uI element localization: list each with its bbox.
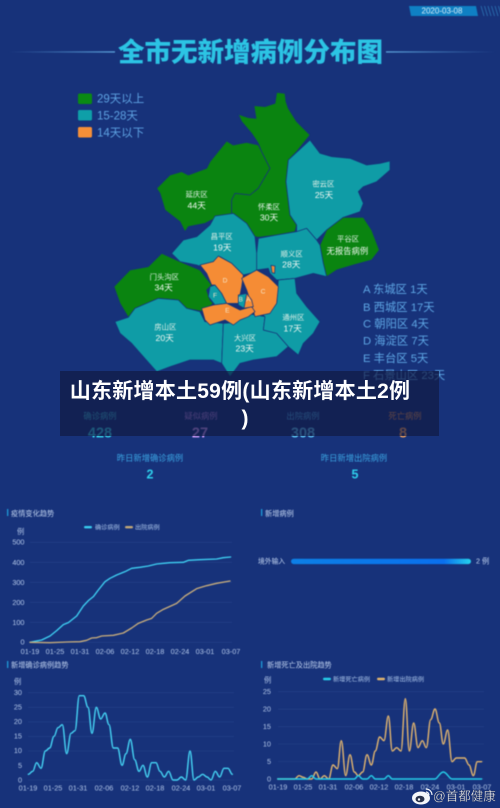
panel: new deaths and discharges chart: 01-31 [319,782,337,792]
urban district list: F 石景山区 23天 [363,369,445,382]
icon: weibo [412,789,432,804]
urban district list: C 朝阳区 4天 [363,318,429,330]
panel: new deaths and discharges chart: 01-25 [294,782,312,792]
panel: new deaths and discharges chart: 0 [267,774,271,784]
district labels: 大兴区 [234,333,256,342]
district labels: 通州区 [282,313,304,322]
panel: new deaths and discharges chart: 03-07 [473,782,491,792]
panel: epidemic trend chart: 02-06 [96,647,114,656]
panel: epidemic trend chart: 疫情变化趋势 [11,509,54,518]
panel: epidemic trend chart: 500 [12,538,24,546]
panel: new confirmed trend chart: 新增确诊病例趋势 [11,660,69,670]
district map [114,92,390,377]
panel: new confirmed trend chart: 0 [18,776,22,784]
panel: epidemic trend chart: 02-24 [171,647,189,656]
line: confirmed and discharged cases [30,557,231,643]
district: Shijingshan F [208,285,227,305]
panel: epidemic trend chart: 200 [12,598,24,607]
district labels: 顺义区 [281,249,303,258]
line: new confirmed cases [28,696,232,780]
panel: epidemic trend chart: 例 [17,527,24,536]
panel: epidemic trend chart: 0 [20,638,24,646]
map legend: 29天以上 [97,92,144,105]
district labels [150,180,368,354]
panel: new confirmed trend chart: 25 [14,702,22,712]
chart legend: 确诊病例 [95,524,120,532]
summary statistics: 428 [88,426,112,442]
urban district list [363,283,445,382]
panel: new deaths and discharges chart: 02-12 [370,782,388,792]
district labels: 延庆区 [186,190,208,199]
district labels: 密云区 [312,180,334,189]
summary statistics: 5 [352,468,359,482]
summary statistics: 昨日新增确诊病例 [117,453,183,463]
headline overlay: 山东新增本土59例(山东新增本土2例 [70,379,410,403]
panel: epidemic trend chart: 01-19 [21,647,39,656]
panel: new confirmed trend chart: 02-24 [172,784,190,792]
panel: new deaths and discharges chart: 5 [267,757,271,766]
panel: new deaths and discharges chart [261,660,491,792]
district labels: 门头沟区 [150,272,179,281]
district labels: 昌平区 [211,232,233,241]
district: Huairou [232,92,310,237]
panel: new deaths and discharges chart: 例 [264,676,271,684]
panel: epidemic trend chart: 01-25 [46,647,64,656]
panel: new confirmed trend chart: 15 [14,732,22,740]
panel: epidemic trend chart: 03-07 [222,647,240,656]
district labels: E [225,308,230,315]
panel: new confirmed trend chart: 01-25 [44,784,62,792]
panel: new confirmed trend chart: 02-06 [95,784,113,792]
district labels: B [238,296,243,303]
panel: new deaths and discharges chart: 10 [263,740,271,748]
district: Yanqing [157,141,270,232]
headline overlay [60,371,439,436]
panel: epidemic trend chart: 400 [12,558,24,567]
panel: new confirmed trend chart: 02-18 [146,784,164,792]
panel: new deaths and discharges chart: 新增死亡及出院趋势 [267,660,332,670]
district: Chaoyang C [242,270,278,317]
district labels: 44天 [188,200,206,210]
chart legend: 新增出院病例 [387,676,424,684]
title: 全市无新增病例分布图 [118,30,383,70]
panel: new cases bar [258,509,489,566]
district: Shunyi [257,228,327,280]
panel: new cases bar: 2 例 [476,556,489,566]
district labels: 23天 [236,344,254,354]
map legend [78,92,144,139]
district labels: C [261,288,266,295]
district labels: 34天 [155,283,173,293]
panel: epidemic trend chart: 300 [12,578,24,587]
district: Changping [172,213,257,275]
urban district list: E 丰台区 5天 [363,351,428,365]
watermark [412,788,496,804]
lines: new deaths and discharges [278,699,482,779]
panel: new confirmed trend chart: 01-19 [19,784,37,792]
district labels: A [246,296,251,303]
panel: new deaths and discharges chart: 15 [263,722,271,731]
panel: new deaths and discharges chart: 25 [263,687,271,696]
summary statistics: 疑似病例 [184,411,218,421]
district labels: 怀柔区 [258,202,280,211]
summary statistics: 2 [147,468,154,482]
district labels: 房山区 [154,323,176,332]
urban district list: A 东城区 1天 [363,283,428,296]
district: Miyun [286,140,390,240]
district labels: 25天 [315,190,333,200]
panel: new confirmed trend chart: 20 [14,717,22,726]
panel: new confirmed trend chart: 02-12 [121,784,139,792]
district: Dongcheng A [243,293,253,308]
panel: new deaths and discharges chart: 02-06 [345,782,363,792]
urban district list: B 西城区 17天 [363,301,435,314]
summary statistics: 8 [399,426,407,442]
panel: epidemic trend chart: 100 [12,618,24,627]
panel: new confirmed trend chart: 03-07 [223,784,241,792]
panel: new cases bar: 境外输入 [258,556,285,566]
map legend: 15-28天 [97,110,138,122]
headline overlay: ) [242,407,248,430]
district labels: D [223,278,228,285]
district labels: 无报告病例 [327,246,368,256]
chart legend [84,524,160,532]
chart legend: 新增死亡病例 [333,676,370,684]
chart legend: 出院病例 [135,524,160,532]
panel: new cases bar: 新增病例 [265,509,294,518]
panel: new confirmed trend chart: 01-31 [69,784,87,792]
panel: epidemic trend chart [7,509,240,656]
panel: new confirmed trend chart: 03-01 [197,784,215,792]
district: Pinggu [320,217,379,277]
watermark: @首都健康 [433,788,496,804]
panel: epidemic trend chart: 02-12 [121,647,139,656]
Chaoyang exclave [271,265,275,273]
district: Fengtai E [202,303,255,325]
summary statistics: 308 [291,426,315,442]
panel: new deaths and discharges chart: 02-24 [421,782,439,792]
district: Daxing [222,313,288,377]
summary statistics: 死亡病例 [388,411,422,421]
panel: epidemic trend chart: 01-31 [71,647,89,656]
summary statistics: 出院病例 [286,411,320,421]
panel: new confirmed trend chart: 例 [14,677,21,686]
district labels: 20天 [156,333,174,343]
date tag: 2020-03-08 [422,7,463,16]
panel: new confirmed trend chart [7,660,241,792]
summary statistics: 27 [192,426,208,442]
summary statistics: 昨日新增出院病例 [321,453,387,463]
chart legend [323,676,424,684]
urban district list: D 海淀区 7天 [363,334,429,348]
panel: new confirmed trend chart: 10 [14,746,22,755]
panel: new deaths and discharges chart: 20 [263,704,271,714]
district: Fangshan [115,298,223,372]
panel: epidemic trend chart: 02-18 [146,647,164,656]
panel: new confirmed trend chart: 5 [18,761,22,770]
district labels: 平谷区 [337,234,359,243]
district: Haidian D [200,256,243,303]
district: Tongzhou [257,278,320,355]
panel: new deaths and discharges chart: 02-18 [395,782,413,792]
date tag [409,6,500,16]
district labels: F [213,293,217,300]
district labels: 17天 [284,323,302,333]
summary statistics [83,411,422,482]
panel: new confirmed trend chart: 30 [14,688,22,697]
district: Mentougou [114,253,213,317]
panel: new deaths and discharges chart: 01-19 [269,782,287,792]
district: Xicheng B [238,293,247,308]
district labels: 19天 [213,242,232,252]
district labels: 30天 [260,212,278,222]
summary statistics: 确诊病例 [83,411,117,421]
panel: new deaths and discharges chart: 03-01 [447,782,465,792]
district labels: 28天 [282,260,301,270]
panel: epidemic trend chart: 03-01 [196,647,214,656]
bar: imported cases [291,559,471,564]
map legend: 14天以下 [97,126,144,139]
